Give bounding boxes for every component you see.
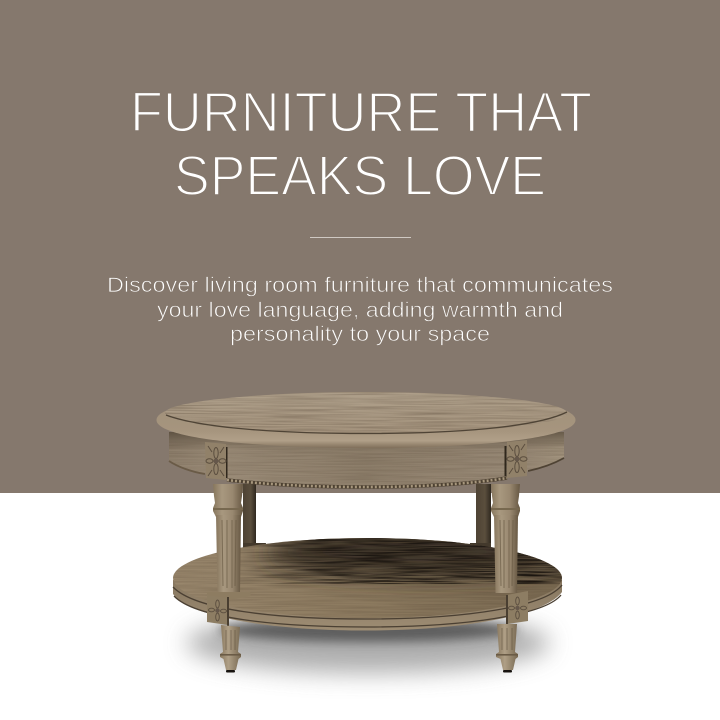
- title: SPEAKS LOVE: [174, 144, 546, 207]
- lower shelf: [172, 538, 562, 630]
- round wooden coffee table: [156, 392, 576, 673]
- lower right foot: [496, 624, 518, 672]
- subtitle text block: personality to your space: [230, 322, 490, 346]
- subtitle text block: Discover living room furniture that communicates: [107, 273, 613, 297]
- title: [130, 80, 592, 207]
- subtitle text block: [107, 273, 613, 346]
- taupe background band: [0, 0, 720, 493]
- lower left foot: [220, 625, 241, 672]
- front right leg: [491, 484, 520, 593]
- carved rosette left apron block: [205, 442, 226, 480]
- shelf right leg block: [506, 591, 528, 624]
- table top surface: [165, 392, 568, 434]
- floor shadow: [186, 613, 550, 673]
- divider rule: [310, 237, 411, 238]
- apron with rope trim: [169, 432, 564, 488]
- shelf left leg block: [207, 592, 251, 626]
- subtitle text block: your love language, adding warmth and: [157, 298, 563, 322]
- table top rim: [156, 392, 576, 448]
- back legs: [243, 484, 491, 548]
- carved rosette right apron block: [507, 440, 527, 478]
- front left leg: [213, 484, 243, 593]
- title: FURNITURE THAT: [130, 80, 592, 144]
